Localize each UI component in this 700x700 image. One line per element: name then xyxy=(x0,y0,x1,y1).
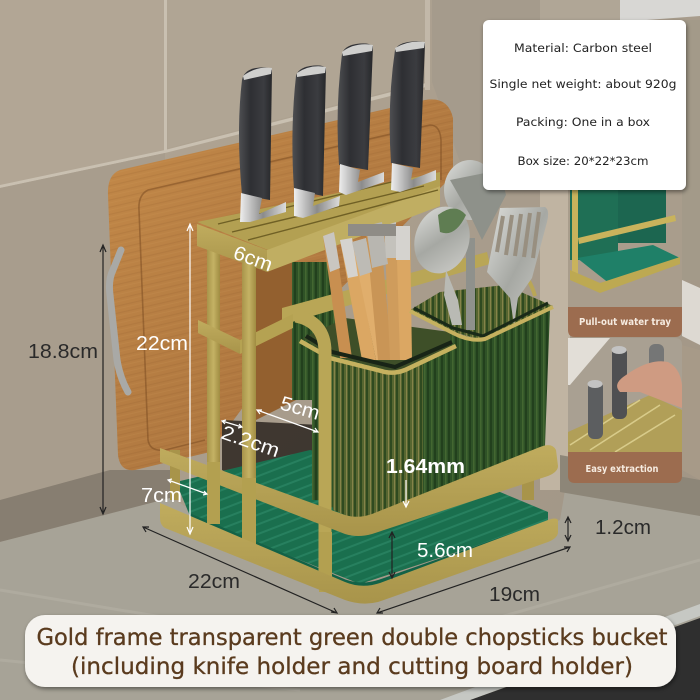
arrow: 5.6cm xyxy=(389,532,395,578)
rack front legs and arm xyxy=(242,262,325,572)
label: 5cm: 5cm xyxy=(278,393,322,425)
lower front legs xyxy=(207,462,332,592)
panel: specifications xyxy=(483,20,686,190)
arrow: 22cm height xyxy=(187,224,193,534)
arrow: 2.2cm xyxy=(222,420,242,428)
label: 1.64mm: 1.64mm xyxy=(386,456,465,478)
dimension labels xyxy=(28,242,651,606)
label: easy extraction: Easy extraction xyxy=(586,464,658,475)
label: 18.8cm: 18.8cm xyxy=(28,341,98,363)
back ladle and skimmer xyxy=(444,160,506,330)
label: 22cm height: 22cm xyxy=(136,333,188,355)
arrow: 1.64mm xyxy=(403,480,409,507)
dark shadow under rack xyxy=(222,420,320,490)
rising rear bar of the rack xyxy=(282,252,490,322)
title banner xyxy=(25,615,676,687)
chopsticks xyxy=(323,222,412,360)
panel: easy extraction photo xyxy=(568,338,682,452)
right bucket xyxy=(410,303,553,490)
upper gold band xyxy=(160,445,558,536)
title line 1: Gold frame transparent green double chopsticks bucket xyxy=(36,625,668,651)
title line 2: (including knife holder and cutting board holder) xyxy=(71,654,633,680)
label: 7cm: 7cm xyxy=(141,485,182,507)
spec: box size: Box size: 20*22*23cm xyxy=(518,154,648,168)
label: 5.6cm: 5.6cm xyxy=(417,540,473,562)
label: 1.2cm: 1.2cm xyxy=(595,517,651,539)
label: 19cm: 19cm xyxy=(489,584,540,606)
arrow: 18.8cm xyxy=(100,245,106,514)
label: 22cm width: 22cm xyxy=(188,571,240,593)
arrow: 7cm xyxy=(168,479,207,495)
spatula xyxy=(487,207,548,325)
rack rear legs xyxy=(170,235,534,505)
knife shelf xyxy=(197,172,440,272)
spec: weight: Single net weight: about 920g xyxy=(490,77,676,91)
arrow: 19cm xyxy=(377,547,570,613)
label: 6cm: 6cm xyxy=(230,242,275,276)
cutting board xyxy=(108,99,453,470)
arrow: 1.2cm xyxy=(565,517,571,541)
spec: material: Material: Carbon steel xyxy=(514,41,652,55)
panel: pull-out water tray photo xyxy=(568,186,682,307)
spec: packing: Packing: One in a box xyxy=(516,115,650,129)
dimension arrows xyxy=(100,224,571,613)
bucket interiors xyxy=(303,268,553,372)
knife 1 xyxy=(239,67,286,222)
knife 3 xyxy=(338,43,384,195)
left bucket xyxy=(300,336,456,520)
arrow: 22cm width xyxy=(143,527,337,613)
middle side bracket xyxy=(198,314,293,354)
label: pull-out water tray xyxy=(568,307,682,337)
water tray xyxy=(176,450,548,585)
front ladle xyxy=(406,199,478,325)
back bucket behind the rack xyxy=(292,262,335,500)
label: easy extraction xyxy=(568,452,682,483)
board handle xyxy=(109,250,128,392)
knife 4 xyxy=(390,41,436,192)
gold base frame xyxy=(160,503,558,604)
wooden board seen through the rack xyxy=(256,262,296,420)
label: pull-out water tray: Pull-out water tray xyxy=(579,317,671,328)
arrow: 5cm xyxy=(257,410,318,432)
knife 2 xyxy=(292,65,340,218)
label: 2.2cm: 2.2cm xyxy=(218,422,282,462)
